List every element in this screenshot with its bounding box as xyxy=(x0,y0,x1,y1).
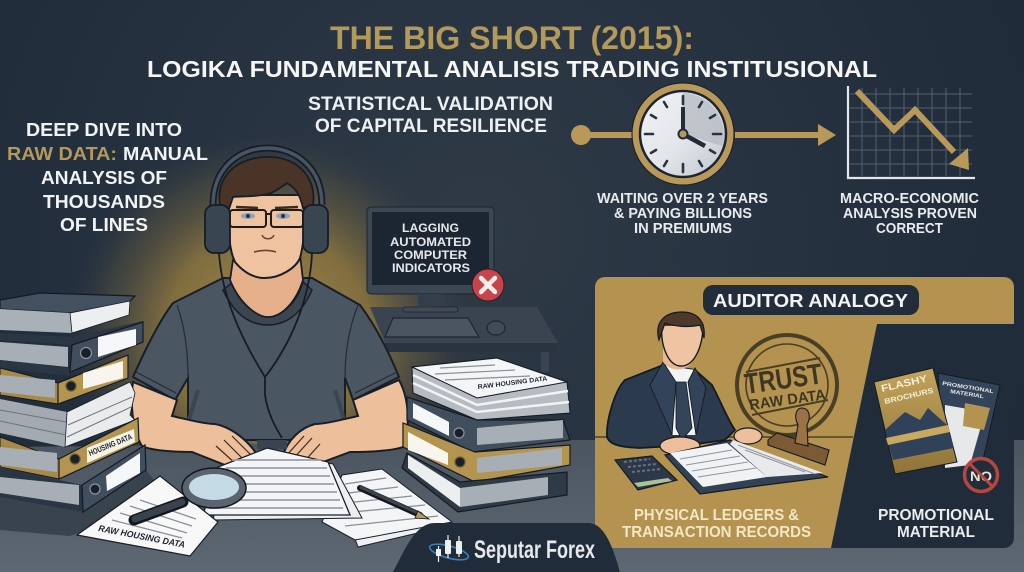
caption: promotional material xyxy=(878,507,994,541)
caption: macro-economic analysis: CORRECT xyxy=(876,221,943,237)
panel dark section xyxy=(831,324,1014,548)
bottom binder xyxy=(402,453,567,512)
title xyxy=(147,20,877,82)
neck xyxy=(230,255,303,317)
rubber stamp xyxy=(768,408,829,465)
bottom dark binder xyxy=(0,445,146,512)
promotional leaflet: PROMOTIONAL xyxy=(942,381,995,395)
computer desk xyxy=(370,307,558,372)
promotional leaflet xyxy=(938,373,1000,468)
title: LOGIKA FUNDAMENTAL ANALISIS TRADING INSTITUSIONAL xyxy=(147,56,877,82)
caption: waiting over 2 years: & PAYING BILLIONS xyxy=(614,206,752,222)
timeline arrow xyxy=(735,124,836,146)
panel: auditor analogy xyxy=(595,277,1014,548)
flashy brochure: FLASHY xyxy=(880,374,929,395)
monitor xyxy=(367,207,494,312)
icon: clock xyxy=(632,83,734,185)
paper pile xyxy=(412,358,570,420)
panel gold background xyxy=(595,277,1014,548)
gold binder xyxy=(403,423,570,482)
dark binder xyxy=(0,321,143,376)
glasses and eyes xyxy=(230,207,303,227)
text: statistical validation xyxy=(308,94,553,137)
caption: physical ledgers xyxy=(622,507,811,541)
hair xyxy=(219,157,313,212)
analyst with headphones xyxy=(132,148,408,468)
housing data binder: HOUSING DATA xyxy=(87,432,134,458)
desk shadow xyxy=(0,470,170,536)
monitor text: AUTOMATED xyxy=(390,237,471,249)
icon: no sign: NO xyxy=(970,468,992,484)
raw housing data sheet xyxy=(77,476,218,556)
timeline start dot and line xyxy=(571,125,632,145)
stamp imprint: RAW DATA xyxy=(748,386,827,414)
papers on desk xyxy=(77,440,452,556)
stamp imprint: TRUST xyxy=(743,358,824,401)
face xyxy=(228,195,304,278)
paper pile: RAW HOUSING DATA xyxy=(477,375,548,391)
left stack of binders xyxy=(0,293,146,512)
caption: promotional material: PROMOTIONAL xyxy=(878,507,994,524)
text: deep dive into raw data xyxy=(7,119,208,235)
flashy brochure xyxy=(874,368,957,474)
open ledger xyxy=(665,440,828,494)
flashy brochure: BROCHURS xyxy=(883,386,934,406)
icon: magnifying glass xyxy=(134,468,246,520)
monitor text xyxy=(390,223,471,275)
caption: waiting over 2 years: WAITING OVER 2 YEARS xyxy=(597,191,768,207)
logo badge: seputar forex: Seputar Forex xyxy=(474,536,595,564)
icon: candlesticks xyxy=(428,535,470,563)
icon: pen xyxy=(360,487,429,519)
timeline with clock xyxy=(571,83,836,185)
dark binder xyxy=(407,397,570,452)
housing data binder xyxy=(0,418,139,479)
gold desk edge xyxy=(595,436,853,438)
icon: red cross xyxy=(472,269,504,301)
stamp imprint xyxy=(737,335,837,435)
t-shirt xyxy=(133,278,399,440)
chart: falling line xyxy=(848,86,975,178)
top book xyxy=(0,293,135,333)
calculator xyxy=(615,456,677,490)
title: THE BIG SHORT (2015): xyxy=(330,20,694,56)
mouse xyxy=(487,321,505,335)
text: deep dive into raw data: DEEP DIVE INTO xyxy=(26,119,182,140)
text: deep dive into raw data: ANALYSIS OF xyxy=(41,167,167,188)
caption: promotional material: MATERIAL xyxy=(897,524,975,541)
gold binder xyxy=(0,355,128,404)
golden glow behind analyst xyxy=(63,130,473,540)
right arm xyxy=(283,380,408,468)
central document xyxy=(203,440,362,520)
earphone cables xyxy=(219,253,312,438)
logo badge: seputar forex xyxy=(393,523,620,572)
computer workstation xyxy=(367,207,558,372)
right stack of binders xyxy=(402,358,570,512)
icon: no sign xyxy=(964,458,998,492)
loose paper stack xyxy=(0,382,135,447)
caption: macro-economic analysis: MACRO-ECONOMIC xyxy=(840,191,980,207)
text: deep dive into raw data: MANUAL xyxy=(123,143,208,164)
caption: physical ledgers: TRANSACTION RECORDS xyxy=(622,524,811,541)
caption: physical ledgers: PHYSICAL LEDGERS & xyxy=(634,507,799,524)
nose and mouth xyxy=(254,235,276,252)
headphones xyxy=(205,148,328,253)
right sheets xyxy=(322,469,452,547)
heading pill: AUDITOR ANALOGY xyxy=(713,290,909,311)
monitor text: COMPUTER xyxy=(394,250,468,262)
desk xyxy=(0,440,1024,572)
monitor text: LAGGING xyxy=(402,223,459,235)
caption: waiting over 2 years: IN PREMIUMS xyxy=(634,221,732,237)
monitor text: INDICATORS xyxy=(392,263,470,275)
left arm xyxy=(132,382,259,467)
text: deep dive into raw data: THOUSANDS xyxy=(43,191,165,212)
auditor figure xyxy=(607,312,762,455)
promotional leaflet: MATERIAL xyxy=(950,389,985,400)
text: statistical validation: OF CAPITAL RESILIENCE xyxy=(315,116,547,137)
caption: macro-economic analysis xyxy=(840,191,980,237)
keyboard xyxy=(385,318,479,337)
caption: waiting over 2 years xyxy=(597,191,768,237)
raw housing data sheet: RAW HOUSING DATA xyxy=(98,523,186,550)
caption: macro-economic analysis: ANALYSIS PROVEN xyxy=(843,206,977,222)
text: deep dive into raw data: OF LINES xyxy=(60,214,148,235)
text: statistical validation: STATISTICAL VALIDATION xyxy=(308,94,553,115)
heading pill xyxy=(703,285,919,315)
text: deep dive into raw data: RAW DATA: xyxy=(7,143,117,164)
